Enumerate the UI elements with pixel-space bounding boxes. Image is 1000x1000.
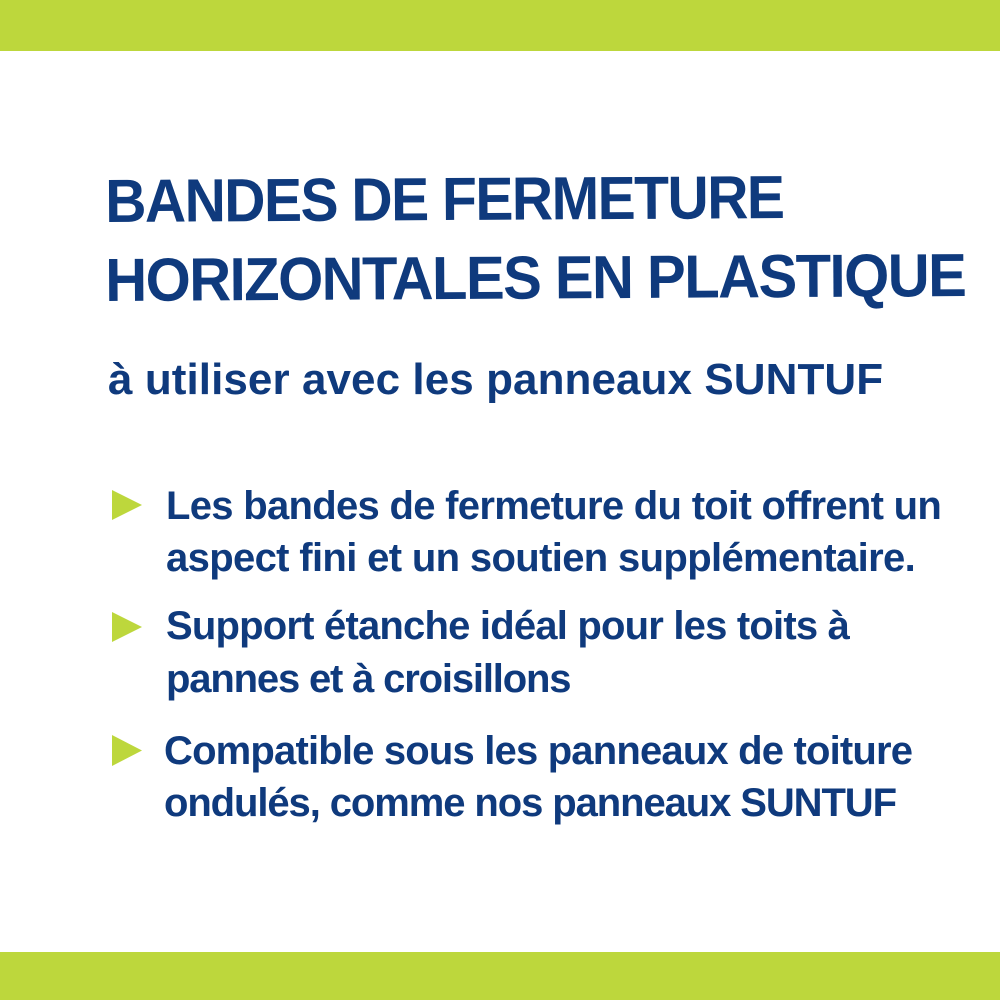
bullet text 3: ondulés, comme nos panneaux SUNTUF — [164, 781, 896, 825]
bullet icon 1 — [112, 490, 142, 520]
bullet icon 2 — [112, 612, 142, 642]
bullet text 2 — [166, 604, 850, 701]
bullet text 1 — [166, 484, 941, 580]
subtitle: à utiliser avec les panneaux SUNTUF — [108, 355, 883, 404]
title — [105, 163, 966, 314]
bullet text 2: pannes et à croisillons — [166, 657, 570, 701]
bottom green band — [0, 952, 1000, 1000]
title: HORIZONTALES EN PLASTIQUE — [105, 241, 966, 314]
bullet text 3 — [164, 728, 912, 825]
bullet text 2: Support étanche idéal pour les toits à — [166, 604, 849, 648]
bullet text 3: Compatible sous les panneaux de toiture — [164, 728, 912, 772]
bullet text 1: Les bandes de fermeture du toit offrent un — [166, 484, 941, 528]
bullet icon 3 — [112, 735, 142, 766]
bullet text 1: aspect fini et un soutien supplémentaire. — [166, 536, 915, 580]
top green band — [0, 0, 1000, 51]
title: BANDES DE FERMETURE — [105, 163, 784, 234]
